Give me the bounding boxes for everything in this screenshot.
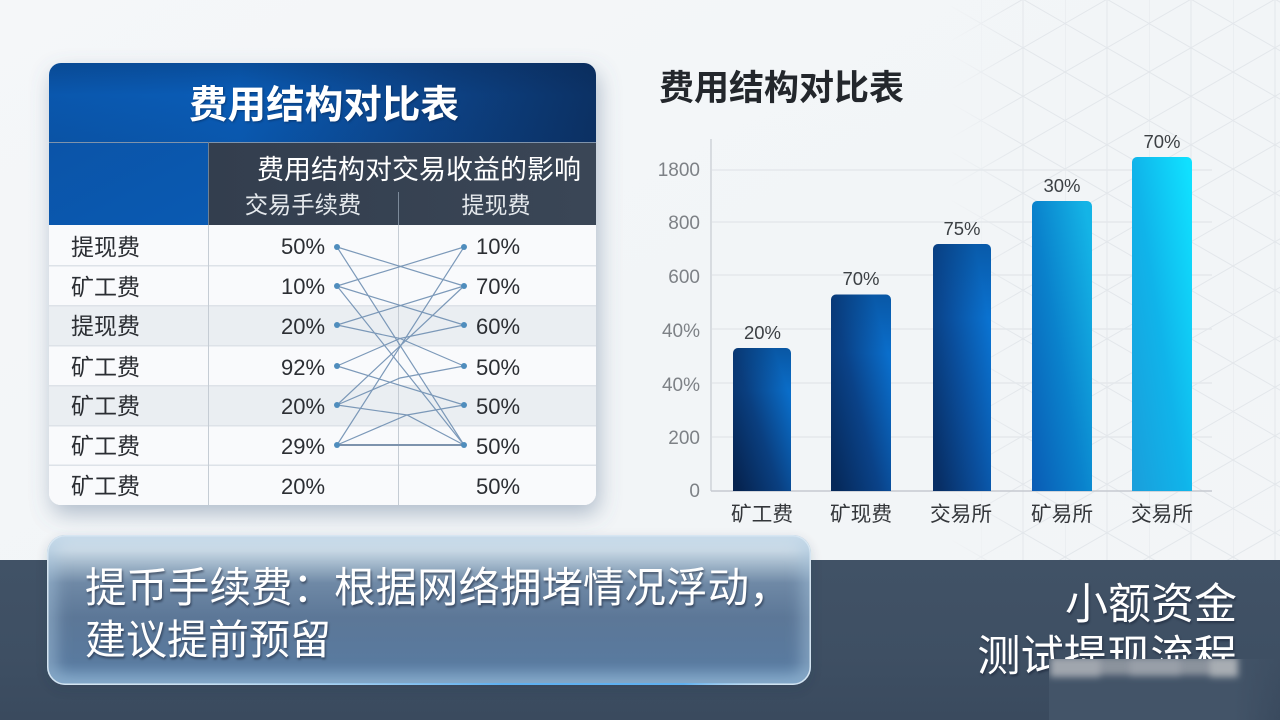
bar value labels: 75%	[943, 218, 981, 239]
callout: withdrawal fee note: 提币手续费：根据网络拥堵情况浮动，	[85, 554, 791, 614]
table body rows: 20%	[281, 314, 325, 339]
category labels: 矿工费	[731, 497, 793, 527]
table body rows	[49, 225, 596, 505]
table header row: 费用结构对交易收益的影响	[257, 148, 581, 187]
bottom band	[0, 560, 1280, 720]
bar value labels	[744, 131, 1181, 343]
bar value labels: 70%	[842, 268, 880, 289]
table title banner	[49, 63, 596, 142]
y axis labels: 0	[689, 481, 700, 502]
table body rows: 50%	[476, 355, 520, 380]
tagline: test small funds: 小额资金	[1065, 570, 1237, 632]
table body rows: 50%	[476, 434, 520, 459]
tagline: test small funds	[977, 570, 1237, 684]
bar value labels: 70%	[1143, 131, 1181, 152]
y axis labels: 40%	[662, 375, 700, 396]
y axis labels: 1800	[658, 160, 700, 181]
table header row: 提现费	[462, 186, 530, 220]
table body rows: 29%	[281, 434, 325, 459]
category labels: 交易所	[1131, 497, 1193, 527]
category labels: 矿易所	[1031, 497, 1093, 527]
bar value labels: 30%	[1043, 175, 1081, 196]
table header row: 交易手续费	[245, 186, 361, 220]
bars	[733, 157, 1192, 491]
category labels: 矿现费	[830, 497, 892, 527]
table body rows: 矿工费	[71, 467, 140, 501]
table body rows: 70%	[476, 274, 520, 299]
y axis labels: 200	[668, 428, 700, 449]
category labels	[731, 497, 1193, 527]
table body rows: 提现费	[71, 228, 140, 262]
callout: withdrawal fee note: 建议提前预留	[85, 606, 331, 666]
y axis labels	[658, 160, 700, 502]
callout: withdrawal fee note	[47, 535, 811, 685]
table body rows: 矿工费	[71, 348, 140, 382]
table body rows: 60%	[476, 314, 520, 339]
connector lines between columns	[334, 244, 467, 448]
table title banner: 费用结构对比表	[189, 74, 459, 130]
table body rows: 20%	[281, 394, 325, 419]
blurred watermark patch	[1049, 659, 1244, 720]
table body rows: 提现费	[71, 307, 140, 341]
bar chart	[658, 131, 1212, 527]
y axis labels: 800	[668, 213, 700, 234]
table body rows: 矿工费	[71, 387, 140, 421]
table body rows: 50%	[281, 234, 325, 259]
table body rows: 50%	[476, 474, 520, 499]
panel: comparison table	[49, 63, 596, 505]
y axis labels: 600	[668, 267, 700, 288]
table body rows: 矿工费	[71, 427, 140, 461]
table body rows: 10%	[476, 234, 520, 259]
chart heading: 费用结构对比表	[659, 60, 904, 111]
table body rows: 矿工费	[71, 268, 140, 302]
y axis labels: 40%	[662, 321, 700, 342]
tagline: test small funds: 测试提现流程	[977, 622, 1237, 684]
bar value labels: 20%	[744, 322, 781, 343]
table header row	[49, 142, 596, 225]
table body rows: 92%	[281, 355, 325, 380]
table body rows: 10%	[281, 274, 325, 299]
table body rows: 20%	[281, 474, 325, 499]
category labels: 交易所	[930, 497, 992, 527]
table body rows: 50%	[476, 394, 520, 419]
